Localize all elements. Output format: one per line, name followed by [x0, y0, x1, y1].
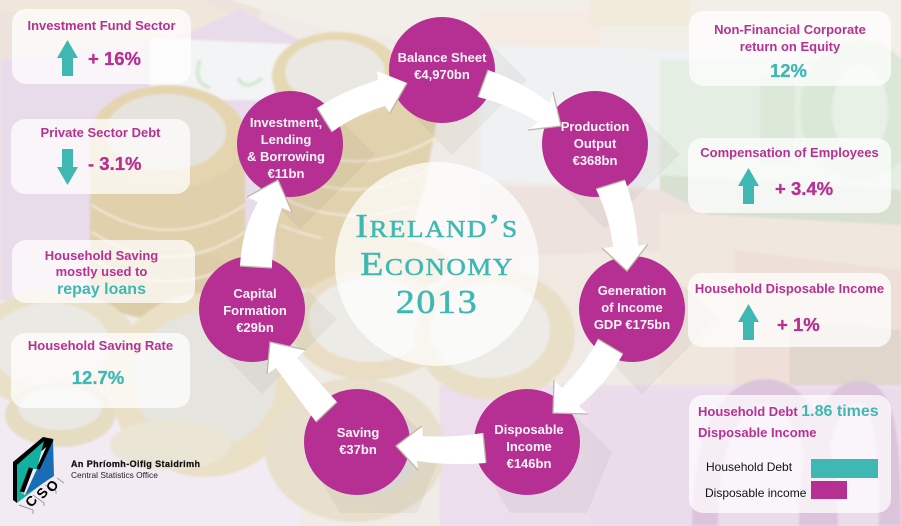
panel: Household Saving mostly used to repay loans — [12, 240, 195, 303]
node: Disposable Income — [474, 389, 580, 495]
arrow: saving to capital — [267, 342, 337, 422]
node: Production Output: Production — [561, 118, 629, 134]
panel: Compensation of Employees — [688, 138, 891, 213]
panel: Household Debt: Disposable Income — [698, 425, 816, 440]
arrow: investment to balance sheet — [317, 71, 407, 132]
title: Economy — [360, 246, 514, 283]
panel: Household Disposable Income: Household Disposable Income — [695, 281, 884, 296]
panel: Household Saving mostly used to repay loans: mostly used to — [56, 264, 147, 279]
node: Production Output: €368bn — [573, 152, 617, 168]
node: Generation of Income: of Income — [601, 300, 663, 314]
node: Capital Formation: Capital — [233, 286, 277, 300]
panel: Compensation of Employees: + 3.4% — [775, 178, 833, 199]
node: Investment, Lending & Borrowing: Investment, — [250, 114, 322, 130]
panel: Non-Financial Corporate return on Equity — [689, 11, 891, 86]
node: Balance Sheet — [389, 17, 495, 123]
arrow: balance sheet to production — [478, 70, 561, 130]
panel: Household Debt: Household Debt 1.86 times — [698, 403, 879, 420]
panel: Household Saving Rate: Household Saving Rate — [28, 338, 173, 353]
panel: Private Sector Debt: Private Sector Debt — [41, 125, 160, 140]
node: Saving — [304, 389, 410, 495]
logo: CSO: Central Statistics Office — [71, 470, 158, 480]
bar chart — [705, 459, 878, 500]
panel: Household Saving mostly used to repay loans: repay loans — [57, 281, 146, 298]
logo: CSO: S — [33, 484, 51, 502]
node: Capital Formation — [199, 256, 305, 362]
panel: Household Debt — [689, 395, 891, 513]
panel: Household Saving mostly used to repay loans: Household Saving — [45, 248, 158, 263]
arrow: generation to disposable — [553, 339, 623, 414]
panel: Non-Financial Corporate return on Equity: return on Equity — [740, 39, 840, 54]
logo: CSO: O — [42, 477, 62, 495]
title: 2013 — [396, 284, 478, 321]
title — [355, 208, 519, 321]
title: Ireland’s — [355, 208, 519, 245]
arrow: disposable to saving — [396, 426, 486, 470]
node: Capital Formation: Formation — [223, 302, 287, 318]
center title circle — [335, 162, 539, 366]
panel: Non-Financial Corporate return on Equity: 12% — [770, 60, 807, 81]
node: Investment, Lending & Borrowing: €11bn — [268, 166, 304, 180]
node: Generation of Income: GDP €175bn — [594, 316, 670, 332]
node: Investment, Lending & Borrowing — [237, 91, 343, 197]
panel: Household Disposable Income — [688, 273, 891, 347]
coin stacks — [90, 135, 245, 285]
node: Investment, Lending & Borrowing: Lending — [261, 132, 311, 146]
node: Saving: €37bn — [339, 442, 377, 456]
bar chart: Household Debt — [706, 460, 792, 474]
node: Production Output — [542, 91, 648, 197]
panel: Household Saving Rate — [11, 333, 190, 408]
icon: down arrow — [57, 149, 78, 185]
icon: up arrow — [738, 304, 759, 340]
icon: up arrow — [57, 40, 78, 76]
arrow: production to generation — [596, 180, 648, 271]
node: Disposable Income: Disposable — [494, 422, 564, 436]
node: Generation of Income: Generation — [598, 282, 666, 298]
logo: CSO: An Phríomh-Oifig Staidrimh — [71, 459, 200, 469]
bar chart: Disposable income — [705, 486, 806, 500]
node: Balance Sheet: Balance Sheet — [398, 50, 486, 64]
node: Production Output: Output — [574, 136, 616, 150]
node: Disposable Income: Income — [506, 438, 552, 454]
panel: Non-Financial Corporate return on Equity: Non-Financial Corporate — [714, 22, 866, 37]
node: Capital Formation: €29bn — [236, 320, 274, 334]
panel: Investment Fund Sector — [12, 9, 191, 84]
panel: Household Saving Rate: 12.7% — [72, 367, 124, 388]
node: Investment, Lending & Borrowing: & Borrowing — [247, 148, 325, 164]
arrow: capital to investment — [240, 180, 292, 268]
panel: Private Sector Debt: - 3.1% — [88, 153, 141, 174]
panel: Private Sector Debt — [11, 119, 190, 194]
node: Generation of Income — [579, 256, 685, 362]
icon: up arrow — [738, 168, 759, 204]
panel: Investment Fund Sector: + 16% — [88, 48, 141, 69]
node: Balance Sheet: €4,970bn — [414, 66, 470, 82]
logo: CSO: C — [22, 492, 40, 510]
logo: CSO — [13, 437, 200, 514]
panel: Compensation of Employees: Compensation of Employees — [700, 145, 879, 160]
panel: Household Disposable Income: + 1% — [777, 314, 820, 335]
node: Saving: Saving — [337, 424, 379, 440]
panel: Investment Fund Sector: Investment Fund Sector — [27, 18, 176, 33]
node: Disposable Income: €146bn — [507, 456, 551, 470]
long shadows of the circles — [215, 33, 717, 513]
